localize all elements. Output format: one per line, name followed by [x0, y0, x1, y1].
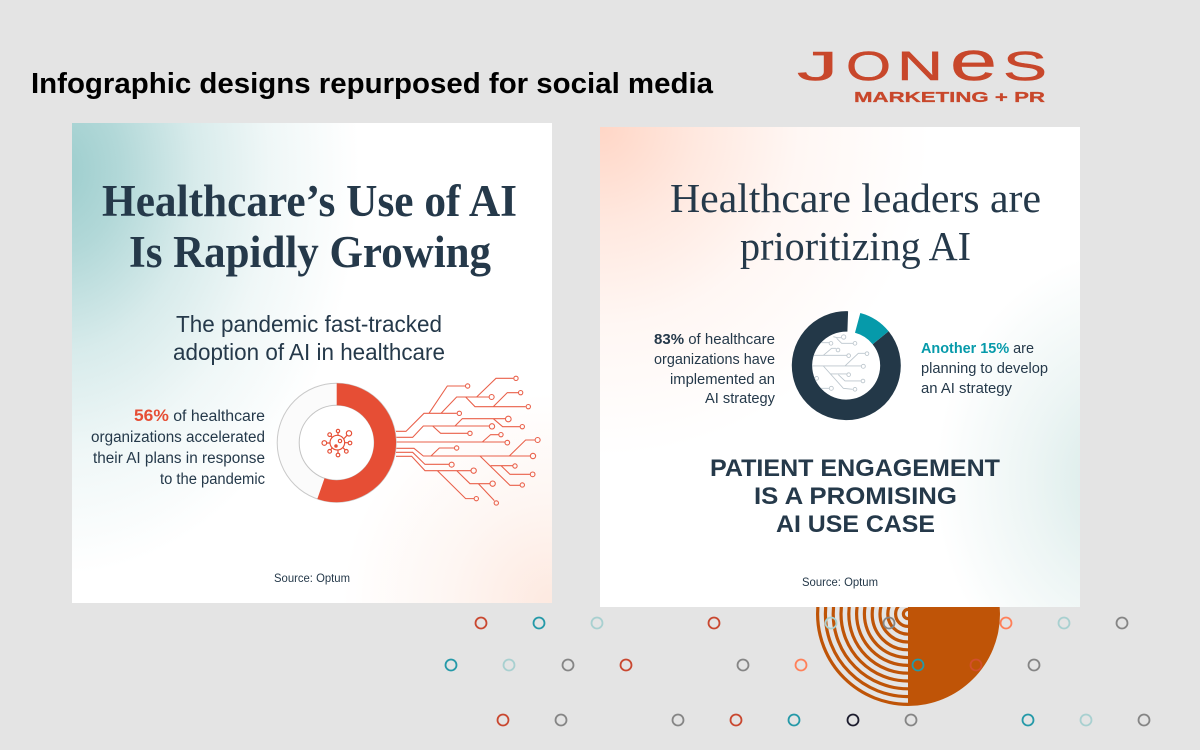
83% statistic text: implemented an — [670, 371, 775, 388]
56% statistic text: organizations accelerated — [91, 429, 265, 446]
logo: Jones Marketing + PR: S — [1003, 43, 1047, 89]
panel subtitle: adoption of AI in healthcare — [173, 339, 445, 365]
panel subtitle: The pandemic fast-tracked — [176, 311, 442, 337]
panel title: prioritizing AI — [740, 223, 971, 269]
logo: Jones Marketing + PR: MARKETING + PR — [854, 89, 1045, 106]
panel title: Healthcare leaders are — [670, 175, 1041, 221]
patient engagement callout: IS A PROMISING — [754, 483, 957, 510]
83% statistic text: 83% of healthcare — [654, 331, 775, 348]
slide heading: Infographic designs repurposed for social media — [31, 68, 714, 100]
panel: healthcare leaders prioritizing AI — [600, 127, 1080, 607]
logo: Jones Marketing + PR: N — [897, 43, 943, 89]
56% statistic text: to the pandemic — [160, 471, 265, 488]
patient engagement callout — [710, 455, 1000, 538]
circuit lines — [396, 376, 540, 505]
15% statistic text: planning to develop — [921, 360, 1048, 377]
56% statistic text: 56% of healthcare — [134, 406, 265, 425]
source note: Source: Optum — [802, 577, 878, 589]
icon: virus — [322, 429, 352, 457]
panel: healthcare's use of AI — [72, 123, 552, 603]
83% statistic text — [654, 331, 775, 407]
logo: Jones Marketing + PR: J — [797, 43, 838, 89]
83% statistic text: AI strategy — [705, 390, 775, 407]
56% statistic text — [91, 406, 265, 488]
panel title: Healthcare’s Use of AI — [102, 176, 517, 226]
source note: Source: Optum — [274, 573, 350, 585]
15% statistic text: Another 15% are — [921, 340, 1034, 357]
patient engagement callout: AI USE CASE — [776, 511, 935, 538]
logo: Jones Marketing + PR — [797, 30, 1047, 106]
15% statistic text — [921, 340, 1048, 397]
patient engagement callout: PATIENT ENGAGEMENT — [710, 455, 1000, 482]
donut chart: 56% — [277, 383, 396, 502]
icon: circuit inside donut — [812, 335, 869, 391]
56% statistic text: their AI plans in response — [93, 450, 265, 467]
decorative half circle with concentric rings — [816, 607, 1000, 706]
decorative ring dots — [446, 618, 1150, 726]
panel title — [102, 176, 517, 277]
83% statistic text: organizations have — [654, 351, 775, 368]
panel subtitle — [173, 311, 445, 365]
donut chart: 83% and 15% — [792, 311, 901, 420]
panel title: Is Rapidly Growing — [129, 227, 491, 277]
15% statistic text: an AI strategy — [921, 380, 1012, 397]
panel title — [670, 175, 1041, 269]
logo: Jones Marketing + PR: O — [846, 43, 891, 89]
logo: Jones Marketing + PR: e — [950, 30, 997, 92]
